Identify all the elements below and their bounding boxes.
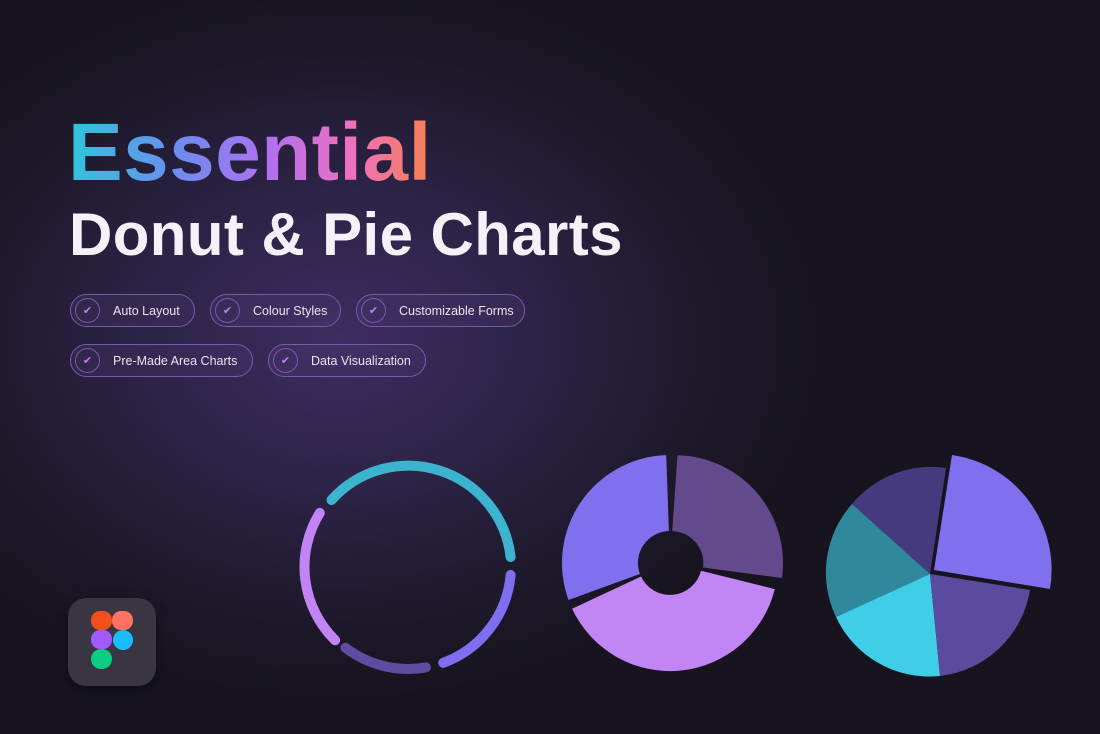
title: Essential: Essential (68, 107, 432, 198)
pill: Auto Layout (70, 294, 195, 327)
chart: segmented ring (304, 466, 511, 669)
pill: Pre-Made Area Charts: Pre-Made Area Charts (113, 354, 237, 368)
pill: Data Visualization: Data Visualization (311, 354, 411, 368)
pill: Pre-Made Area Charts (70, 344, 253, 377)
icon: figma logo (68, 598, 156, 686)
chart: exploded pie (826, 455, 1052, 677)
pill: Customizable Forms (356, 294, 525, 327)
pill: Pre-Made Area Charts: ✔ (83, 355, 92, 367)
pill: Data Visualization (268, 344, 426, 377)
pill: Auto Layout: ✔ (83, 305, 92, 317)
pill: Customizable Forms: ✔ (369, 305, 378, 317)
pill: Colour Styles (210, 294, 341, 327)
pill: Auto Layout: Auto Layout (113, 304, 180, 318)
pill: Colour Styles: ✔ (223, 305, 232, 317)
subtitle: Donut & Pie Charts (69, 201, 623, 268)
pill: Customizable Forms: Customizable Forms (399, 304, 514, 318)
pill: Data Visualization: ✔ (281, 355, 290, 367)
pill: Colour Styles: Colour Styles (253, 304, 327, 318)
chart: donut (562, 455, 783, 671)
